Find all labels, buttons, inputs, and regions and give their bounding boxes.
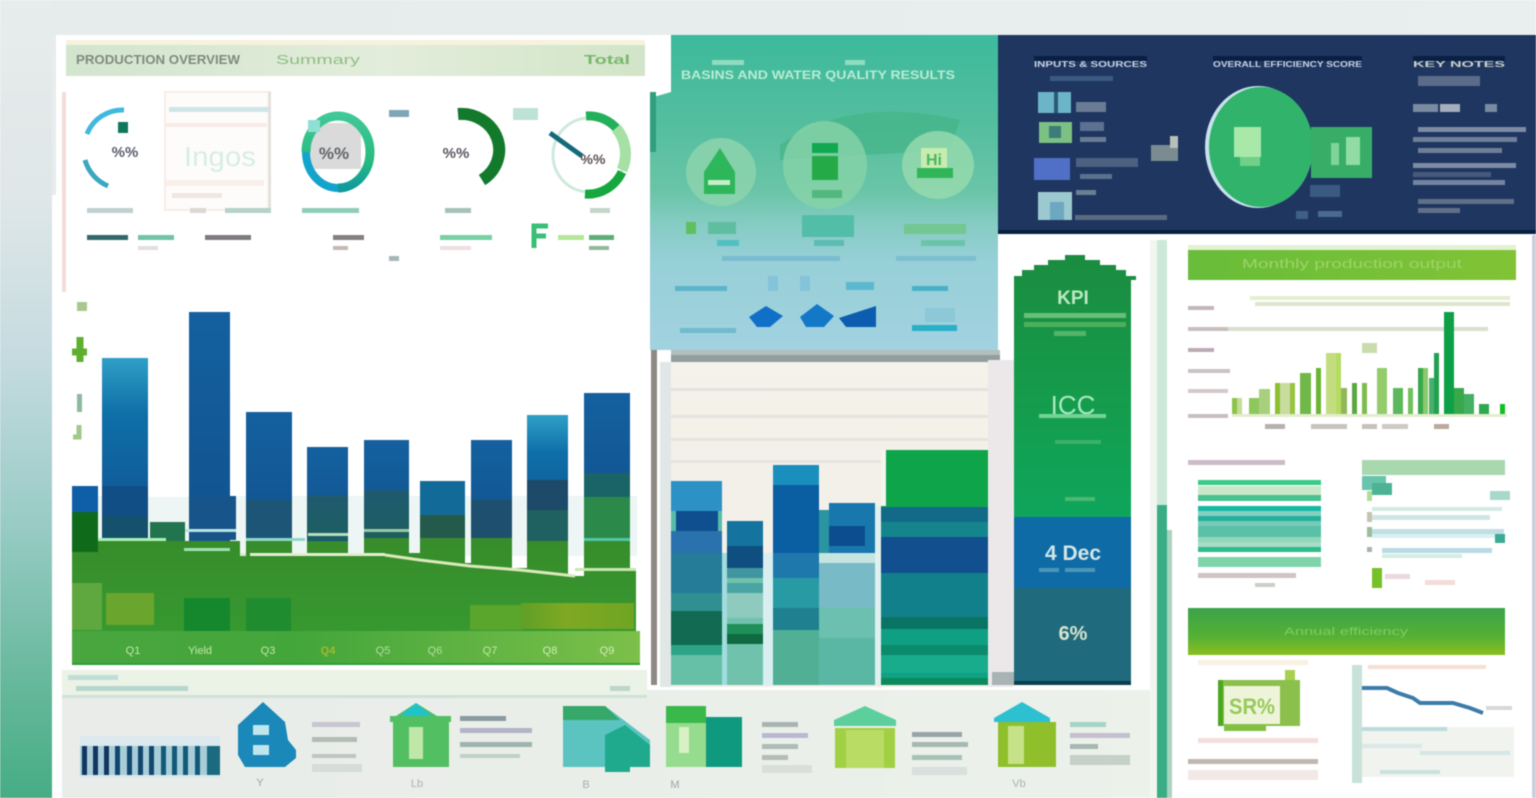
teal title xyxy=(681,60,955,82)
navy headers: OVERALL EFFICIENCY SCORE xyxy=(1213,60,1363,69)
icon: KPI circle 3 xyxy=(902,131,974,199)
gauge 4 clock: %% xyxy=(581,151,606,167)
navy headers: INPUTS & SOURCES xyxy=(1034,60,1148,69)
stacked bar D xyxy=(819,503,881,685)
x axis band: Q3 xyxy=(261,645,275,657)
x axis band xyxy=(72,631,640,665)
gauge 1 xyxy=(85,110,174,250)
x axis band: Q4 xyxy=(321,645,336,657)
icon: KPI circle 2 xyxy=(783,121,867,209)
teal labels xyxy=(686,215,976,261)
tower stat 2: ICC xyxy=(1051,390,1095,420)
tower stat 1: KPI xyxy=(1057,288,1089,309)
stacked bar A xyxy=(671,481,722,685)
side list xyxy=(1362,460,1510,588)
icon card xyxy=(1188,660,1318,780)
gauge 3 arc xyxy=(440,108,538,250)
panel: overview xyxy=(66,40,645,261)
teal title: BASINS AND WATER QUALITY RESULTS xyxy=(681,68,955,82)
icon: green building: Lb xyxy=(411,778,423,790)
x axis band: Q1 xyxy=(126,645,140,657)
icon: teal building xyxy=(563,706,650,791)
tower stat 2 xyxy=(1039,390,1106,501)
dark teal overlay xyxy=(102,473,630,541)
icon: olive building xyxy=(994,702,1130,790)
gauge 4 clock xyxy=(550,116,625,213)
bar chart: main xyxy=(72,302,640,665)
right header xyxy=(1188,245,1516,280)
green field xyxy=(72,512,636,640)
icon: teal building: B xyxy=(582,779,590,791)
panel: stacked bars xyxy=(651,350,1014,687)
icon: lime building xyxy=(834,706,968,775)
gauge 2 ring: %% xyxy=(319,144,349,163)
y axis marks xyxy=(72,302,87,437)
stacked bar B xyxy=(722,521,763,685)
x axis band: Yield xyxy=(188,645,212,657)
panel: bottom icon strip xyxy=(62,670,1157,798)
header bar xyxy=(66,40,645,76)
bars xyxy=(102,312,630,543)
header bar: Summary xyxy=(276,52,361,67)
barcode xyxy=(80,736,220,778)
icon: green teal building xyxy=(666,706,812,791)
small flow chart xyxy=(675,276,957,333)
navy icon list xyxy=(1034,76,1178,220)
navy headers xyxy=(1034,56,1506,69)
stacked bar C xyxy=(763,465,819,685)
tower stat 3 xyxy=(1039,542,1101,572)
small legend xyxy=(534,226,614,250)
icon: KPI circle 3: Hi xyxy=(926,152,942,169)
panel: tower metrics xyxy=(1014,255,1136,685)
icon: olive building: Vb xyxy=(1012,778,1026,790)
pale connector background xyxy=(97,496,637,556)
table card xyxy=(165,92,271,240)
panel: navy summary xyxy=(998,35,1536,234)
x axis band: Q5 xyxy=(376,645,390,657)
icon: green building xyxy=(390,703,532,790)
x axis band: Q8 xyxy=(543,645,557,657)
panel: right column xyxy=(1150,240,1516,798)
striped table xyxy=(1188,460,1321,587)
icon: KPI circle 1 xyxy=(686,138,756,206)
green banner: Annual efficiency xyxy=(1284,626,1409,638)
tower stat 1 xyxy=(1024,288,1126,336)
icon: blue building xyxy=(238,702,362,789)
icon card: SR% xyxy=(1229,694,1275,719)
navy headers: KEY NOTES xyxy=(1413,60,1506,69)
column chart xyxy=(1188,296,1510,429)
navy text column xyxy=(1413,76,1526,213)
header bar: Total xyxy=(584,52,630,67)
green banner xyxy=(1188,608,1505,655)
right header: Monthly production output xyxy=(1242,256,1463,271)
x axis band: Q7 xyxy=(483,645,497,657)
stacked bar E xyxy=(881,450,988,685)
tower stat 3: 4 Dec xyxy=(1045,542,1101,565)
score circle xyxy=(1205,86,1372,219)
x axis band: Q9 xyxy=(600,645,614,657)
table card: Ingos xyxy=(184,141,256,172)
header bar: PRODUCTION OVERVIEW xyxy=(76,52,241,67)
panel: teal KPIs xyxy=(650,35,1000,362)
x axis band: Q6 xyxy=(428,645,442,657)
gauge 3 arc: %% xyxy=(443,145,469,162)
highlight lines on bars xyxy=(184,529,630,541)
icon: green teal building: M xyxy=(670,779,680,791)
gauge 1: %% xyxy=(112,144,138,161)
line chart xyxy=(1352,665,1514,783)
gauge 2 ring xyxy=(302,110,409,261)
tower stat 4: 6% xyxy=(1059,623,1088,645)
icon: blue building: Y xyxy=(256,777,264,789)
